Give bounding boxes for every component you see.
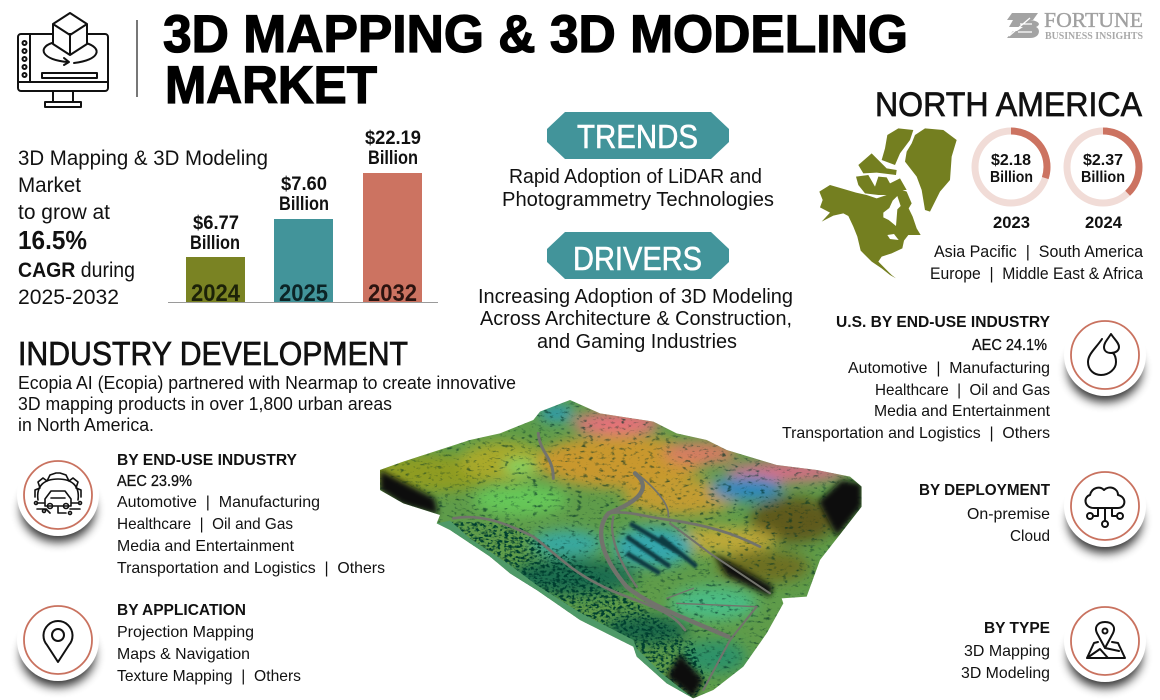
- building shadows: [627, 523, 697, 573]
- text: other regions: Asia Pacific | South America: [934, 243, 1144, 261]
- donut: 2023 value: [975, 131, 1047, 232]
- badge: trends: [547, 112, 729, 159]
- panel: by end-use industry (left): BY END-USE INDUSTRY: [117, 452, 297, 469]
- donut: 2024 value: [1067, 131, 1139, 232]
- panel: U.S. by end-use industry: Media and Entertainment: [874, 403, 1051, 420]
- donut: 2024 value: Billion: [1081, 169, 1125, 186]
- text: industry development description: [18, 373, 516, 435]
- icon: monitor with 3D cube: [18, 13, 108, 107]
- panel: by end-use industry (left): Automotive | Manufacturing: [117, 494, 320, 511]
- text: drivers description: and Gaming Industries: [537, 331, 737, 353]
- icon: map with pin: [1064, 600, 1146, 688]
- icon: gear and car: [17, 454, 99, 542]
- panel: by deployment: Cloud: [1010, 528, 1050, 545]
- title: MARKET: [165, 56, 377, 115]
- bar: 2024: $6.77: [193, 213, 239, 234]
- text: market growth summary: to grow at: [18, 201, 110, 224]
- logo: Fortune Business Insights: FORTUNE: [1044, 8, 1143, 32]
- bar chart: market size: [168, 128, 438, 307]
- text: industry development description: Ecopia AI (Ecopia) partnered with Nearmap to create innovative: [18, 373, 516, 393]
- panel: by deployment: On-premise: [967, 506, 1050, 523]
- panel: by type: 3D Mapping: [964, 643, 1050, 660]
- donut: 2024 value: $2.37: [1083, 152, 1123, 169]
- panel: U.S. by end-use industry: U.S. BY END-USE INDUSTRY: [836, 314, 1050, 331]
- text: other regions: [930, 243, 1144, 283]
- bar: 2025: 2025: [279, 280, 328, 307]
- bar: 2032: 2032: [368, 280, 417, 307]
- text: market growth summary: Market: [18, 174, 81, 197]
- panel: U.S. by end-use industry: AEC 24.1%: [972, 337, 1047, 354]
- panel: by end-use industry (left): AEC 23.9%: [117, 473, 192, 490]
- bar: 2024: 2024: [191, 280, 241, 307]
- text: trends description: [502, 166, 774, 211]
- text: market growth summary: 2025-2032: [18, 286, 119, 309]
- bar: 2032: [363, 128, 422, 307]
- text: market growth summary: [18, 147, 268, 309]
- map: North America: [819, 128, 957, 278]
- panel: U.S. by end-use industry: [782, 314, 1146, 442]
- panel: by application: [17, 599, 301, 687]
- panel: by application: Texture Mapping | Others: [117, 668, 301, 685]
- panel: by application: Projection Mapping: [117, 624, 254, 641]
- text: trends description: Photogrammetry Technologies: [502, 189, 774, 211]
- badge: drivers: [547, 232, 729, 279]
- panel: U.S. by end-use industry: Transportation and Logistics | Others: [782, 425, 1050, 442]
- panel: by deployment: BY DEPLOYMENT: [919, 482, 1050, 499]
- bar: 2032: Billion: [368, 148, 418, 169]
- title: [163, 5, 908, 115]
- panel: by end-use industry (left): [17, 452, 385, 577]
- text: drivers description: Increasing Adoption of 3D Modeling: [478, 286, 793, 308]
- text: industry development description: in North America.: [18, 415, 154, 435]
- text: trends description: Rapid Adoption of LiDAR and: [509, 166, 762, 188]
- donut: 2023 value: $2.18: [991, 152, 1031, 169]
- icon: location pin: [17, 599, 99, 687]
- icon: cloud network: [1064, 465, 1146, 553]
- panel: by application: BY APPLICATION: [117, 602, 246, 619]
- title: 3D MAPPING & 3D MODELING: [163, 5, 908, 64]
- badge: trends: TRENDS: [577, 118, 698, 155]
- logo: Fortune Business Insights: [1007, 8, 1143, 42]
- text: drivers description: Across Architecture & Construction,: [480, 308, 792, 330]
- donut: 2024 value: 2024: [1085, 213, 1123, 232]
- text: industry development description: 3D mapping products in over 1,800 urban areas: [18, 394, 392, 414]
- heading: industry development: INDUSTRY DEVELOPMENT: [18, 335, 408, 372]
- illustration: 3D terrain map: [380, 400, 862, 698]
- text: drivers description: [478, 286, 793, 353]
- panel: by end-use industry (left): Healthcare | Oil and Gas: [117, 516, 293, 533]
- bar: 2025: Billion: [279, 194, 329, 215]
- bar: 2024: Billion: [190, 233, 240, 254]
- text: other regions: Europe | Middle East & Africa: [930, 265, 1144, 283]
- bar: 2024: [186, 213, 245, 307]
- panel: by application: Maps & Navigation: [117, 646, 250, 663]
- text: market growth summary: 3D Mapping & 3D Modeling: [18, 147, 268, 170]
- bar: 2025: [274, 174, 333, 307]
- heading: North America: NORTH AMERICA: [875, 86, 1142, 124]
- icon: droplets: [1064, 314, 1146, 402]
- panel: U.S. by end-use industry: Healthcare | Oil and Gas: [875, 382, 1050, 399]
- donut: 2023 value: Billion: [990, 169, 1033, 186]
- bar: 2025: $7.60: [281, 174, 327, 195]
- logo: Fortune Business Insights: BUSINESS INSIGHTS: [1045, 31, 1143, 42]
- panel: by type: [961, 600, 1146, 688]
- badge: drivers: DRIVERS: [573, 240, 702, 277]
- text: market growth summary: 16.5%: [18, 225, 87, 255]
- panel: by end-use industry (left): Media and Entertainment: [117, 538, 295, 555]
- donut: 2023 value: 2023: [993, 213, 1030, 232]
- bar: 2032: $22.19: [365, 128, 421, 149]
- panel: U.S. by end-use industry: Automotive | Manufacturing: [848, 360, 1050, 377]
- panel: by deployment: [919, 465, 1146, 553]
- header divider: [136, 20, 138, 97]
- text: market growth summary: CAGR during: [18, 259, 135, 282]
- panel: by type: 3D Modeling: [961, 665, 1050, 682]
- panel: by type: BY TYPE: [984, 620, 1050, 637]
- panel: by end-use industry (left): Transportation and Logistics | Others: [117, 560, 385, 577]
